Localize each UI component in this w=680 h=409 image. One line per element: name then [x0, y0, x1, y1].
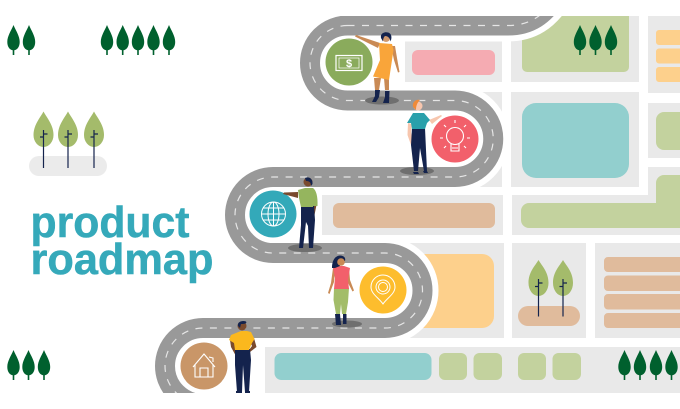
lot: green corner [522, 16, 629, 72]
icon: location pin circle [360, 266, 406, 314]
person: man in green shirt [283, 177, 322, 252]
icon: light bulb circle [432, 116, 478, 162]
lot: peach wide [333, 203, 495, 228]
lot: orange stripes [656, 30, 680, 82]
lot: teal pond [522, 103, 629, 178]
title: product [30, 199, 190, 247]
trees: top left pair [7, 25, 35, 55]
background blocks [265, 16, 680, 393]
lot: peach stripes [604, 257, 680, 328]
colored lots [274, 16, 680, 380]
road surface [165, 0, 554, 404]
road dashes [165, 0, 554, 404]
person: man in teal shirt [400, 100, 442, 175]
icon: house circle [180, 342, 228, 390]
trees: left light green on pill [29, 112, 107, 176]
lot: orange [400, 254, 494, 328]
person: man in yellow shirt [229, 321, 256, 393]
person: woman in pink top [328, 256, 362, 328]
icon: globe circle [250, 190, 296, 238]
person: woman in orange dress [355, 32, 400, 105]
interior white fills [402, 284, 406, 304]
trees: bottom left three [7, 350, 50, 380]
title: roadmap [30, 236, 214, 284]
trees: top right three [574, 25, 617, 55]
title [30, 199, 214, 284]
lot: peach pill [518, 306, 580, 326]
road casing [400, 16, 562, 338]
lot: green L [521, 175, 680, 228]
icon: dollar circle: $ [346, 58, 352, 70]
trees: light green on peach pill [528, 260, 573, 316]
lot: teal long [274, 353, 432, 380]
trees: top row of five [101, 25, 175, 55]
trees: bottom right four [618, 350, 678, 380]
lot: green right [656, 112, 680, 150]
lot: pink [412, 50, 495, 75]
lot: green squares [439, 353, 581, 380]
winding road [165, 0, 554, 404]
icon: dollar circle [326, 38, 372, 86]
